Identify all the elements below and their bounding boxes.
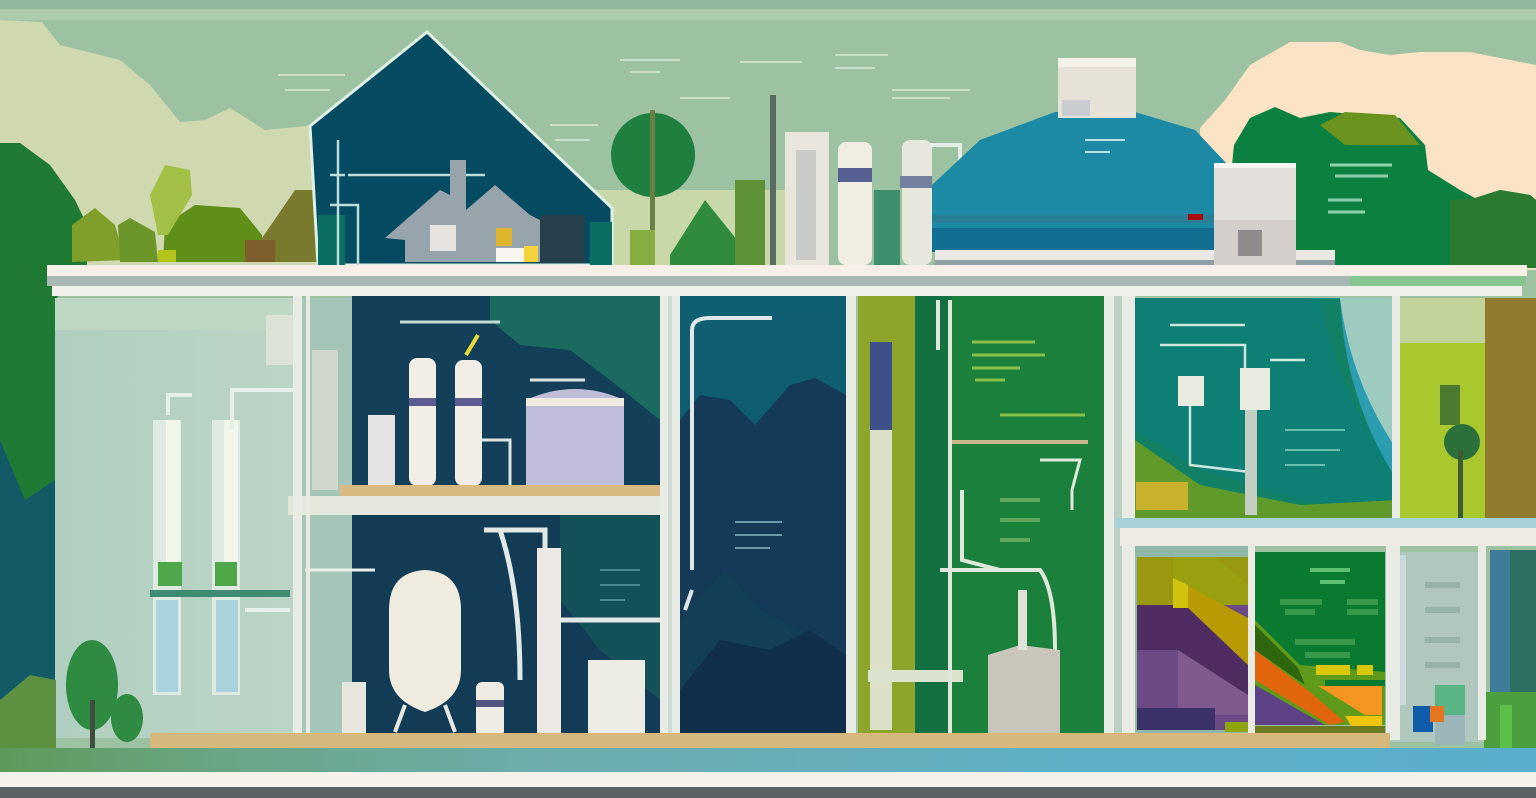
background trees left <box>0 143 318 770</box>
structure: vertical pipes and columns <box>293 296 1486 746</box>
dome tank <box>932 58 1335 265</box>
house: dark gable <box>310 32 612 265</box>
trees right <box>1232 107 1536 268</box>
structure: right intermediate floor <box>1115 518 1536 546</box>
small tree <box>66 640 143 752</box>
central tree and tanks on roof <box>611 95 960 265</box>
structure: roof slab <box>47 265 1527 296</box>
ground floor and base <box>0 733 1536 798</box>
small annotations above roof <box>278 55 970 140</box>
columns left <box>150 420 290 695</box>
tanks <box>368 335 624 486</box>
panel: right lower layered geology <box>1135 546 1536 750</box>
panel: navy lower room <box>305 515 690 748</box>
panel: lime room with trees <box>1400 298 1536 523</box>
panel: navy upper room <box>288 296 670 515</box>
panel: right upper room <box>1135 298 1397 523</box>
panel: central mountains room <box>680 296 846 736</box>
panel: green column room <box>858 296 1105 748</box>
large white tank <box>389 570 461 732</box>
icon: small house <box>385 160 585 263</box>
cabinet on roof <box>1214 163 1296 268</box>
panel: lower left pale room <box>0 298 352 752</box>
